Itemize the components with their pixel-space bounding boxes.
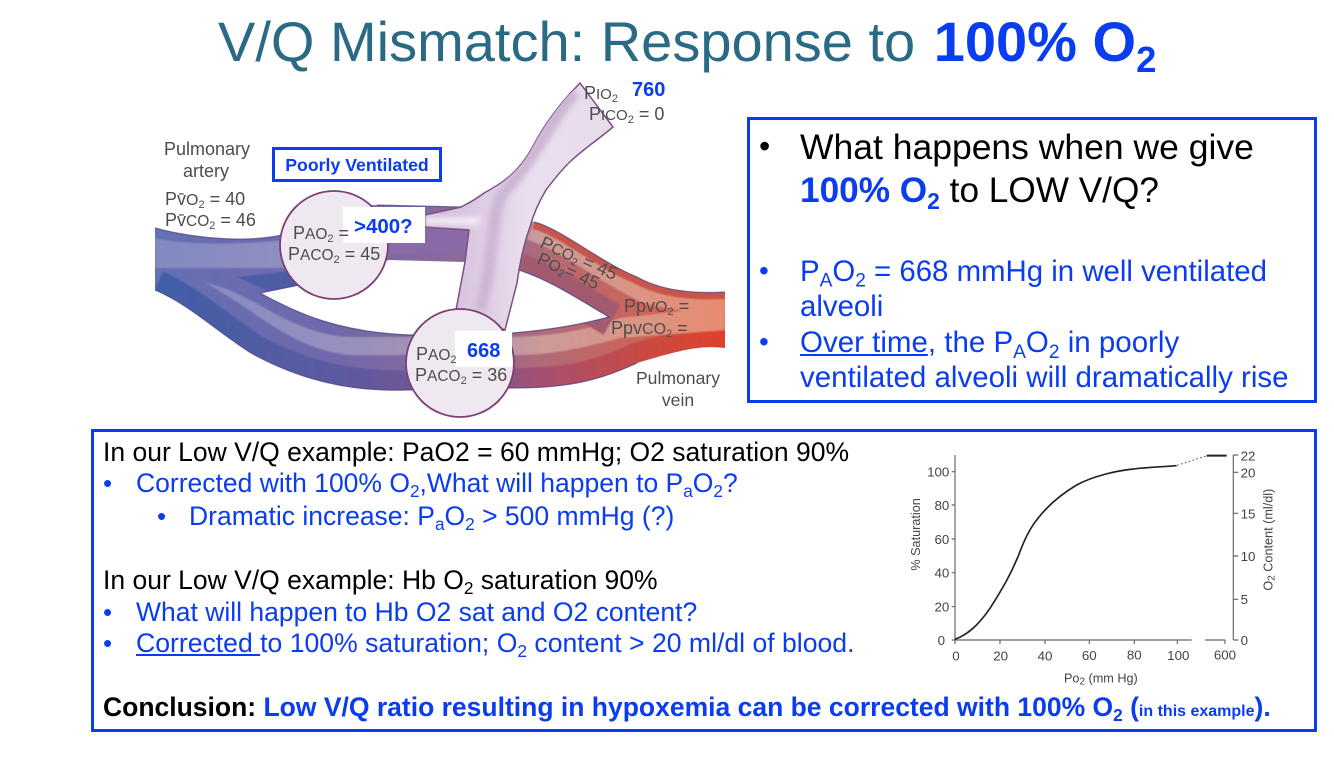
text: In our Low V/Q example: PaO2 = 60 mmHg; O2 saturation 90% <box>103 437 849 467</box>
diagram labels: 2 <box>556 267 566 281</box>
diagram labels: Pv̄CO <box>165 210 209 230</box>
diagram labels: = <box>334 223 349 243</box>
blue values: 668 <box>467 340 500 362</box>
diagram labels: = 0 <box>634 104 664 124</box>
text: • <box>103 597 112 627</box>
text: alveoli <box>800 290 883 323</box>
panel: worked example <box>91 429 1317 732</box>
blue values: >400? <box>354 215 413 238</box>
text: What will happen to Hb O2 sat and O2 content? <box>136 597 697 627</box>
diagram labels: Pulmonary <box>636 368 720 388</box>
diagram labels: PACO <box>288 244 334 264</box>
oxygen dissociation chart: 20 <box>1241 465 1255 480</box>
diagram labels: = 46 <box>215 210 256 230</box>
diagram labels: 2 <box>667 306 674 318</box>
oxygen dissociation chart: 20 <box>993 649 1008 664</box>
oxygen dissociation chart: % Saturation <box>909 498 923 571</box>
text: 100% O2 to LOW V/Q? <box>800 171 1159 214</box>
alveolus: poorly ventilated <box>280 191 388 299</box>
text: • <box>759 255 769 286</box>
diagram labels <box>164 83 720 410</box>
oxygen dissociation chart: Content (ml/dl) <box>1262 489 1276 575</box>
text: Corrected to 100% saturation; O2 content > 20 ml/dl of blood. <box>136 628 854 661</box>
diagram labels: Pulmonary <box>164 139 250 159</box>
airway <box>425 83 613 330</box>
alveolus: well ventilated <box>406 309 514 417</box>
blue values <box>354 79 665 362</box>
oxygen dissociation chart: 40 <box>1038 649 1052 664</box>
diagram labels: = 40 <box>205 189 245 209</box>
diagram labels: 2 <box>612 93 618 105</box>
diagram labels: = <box>672 318 688 338</box>
oxygen dissociation chart: O <box>1262 581 1276 591</box>
oxygen dissociation chart: 22 <box>1241 449 1255 464</box>
oxygen dissociation chart: (mm Hg) <box>1085 672 1138 686</box>
oxygen dissociation chart: 10 <box>1241 549 1255 564</box>
diagram labels: vein <box>662 390 694 410</box>
vessels <box>155 205 725 390</box>
oxygen dissociation chart: Po <box>1064 672 1079 686</box>
diagram labels: = 45 <box>340 244 380 264</box>
text: ventilated alveoli will dramatically rise <box>800 361 1289 394</box>
diagram labels: PIO <box>584 83 612 103</box>
oxygen dissociation chart <box>909 449 1278 688</box>
diagram labels: PpvO <box>624 296 667 316</box>
diagram labels: 2 <box>569 256 579 269</box>
oxygen dissociation chart: 600 <box>1214 647 1236 662</box>
oxygen dissociation chart: 60 <box>1082 648 1097 663</box>
diagram labels: PCO <box>537 232 577 265</box>
title: V/Q Mismatch: Response to 100% O2 <box>218 10 1156 80</box>
diagram labels: artery <box>183 161 229 181</box>
label: poorly ventilated <box>272 147 442 182</box>
diagram labels: PAO <box>293 223 327 243</box>
text: Corrected with 100% O2,What will happen to PaO2? <box>136 468 738 501</box>
text: • <box>103 468 112 498</box>
text: • <box>759 326 769 357</box>
label: poorly ventilated: Poorly Ventilated <box>285 155 429 175</box>
text: What happens when we give <box>800 127 1254 167</box>
diagram labels: 2 <box>334 254 340 266</box>
diagram labels: 2 <box>461 375 467 387</box>
diagram labels: 2 <box>628 114 634 126</box>
panel: low V/Q question <box>747 117 1317 403</box>
diagram labels: PO <box>534 248 563 276</box>
text: • <box>103 628 112 658</box>
text: • <box>157 501 166 531</box>
oxygen dissociation chart: 40 <box>934 566 949 581</box>
diagram: pulmonary gas exchange <box>154 82 1275 685</box>
diagram labels: = 36 <box>467 365 507 385</box>
text: Over time, the PAO2 in poorly <box>800 326 1179 363</box>
question text <box>759 127 1289 394</box>
example text <box>103 437 1271 725</box>
diagram labels: PICO <box>589 104 628 124</box>
oxygen dissociation chart: 2 <box>1079 677 1085 688</box>
value patch: 668 <box>455 331 512 367</box>
diagram labels: PAO <box>416 344 450 364</box>
diagram labels: Pv̄O <box>165 189 198 209</box>
diagram labels: = 45 <box>575 249 620 284</box>
text: Conclusion: Low V/Q ratio resulting in hypoxemia can be corrected with 100% O2 (in this example). <box>103 692 1271 725</box>
blue values: 760 <box>632 79 665 101</box>
oxygen dissociation chart: 2 <box>1267 575 1278 581</box>
oxygen dissociation chart: 0 <box>1241 633 1248 648</box>
oxygen dissociation chart: 0 <box>952 649 960 664</box>
diagram labels: = <box>674 296 689 316</box>
diagram labels: 2 <box>327 233 334 245</box>
oxygen dissociation chart: 100 <box>927 465 949 480</box>
oxygen dissociation chart: 60 <box>934 532 949 547</box>
oxygen dissociation chart: 15 <box>1241 506 1255 521</box>
diagram labels: PACO <box>415 365 461 385</box>
oxygen dissociation chart: 80 <box>934 498 949 513</box>
diagram labels: = 45 <box>562 261 603 293</box>
diagram labels: PpvCO <box>611 318 666 338</box>
oxygen dissociation chart: 5 <box>1241 592 1248 607</box>
diagram labels: 2 <box>209 220 215 232</box>
text: PAO2 = 668 mmHg in well ventilated <box>800 255 1267 292</box>
oxygen dissociation chart: 20 <box>934 600 949 615</box>
oxygen dissociation chart: 100 <box>1167 648 1189 663</box>
text: In our Low V/Q example: Hb O2 saturation 90% <box>103 565 658 598</box>
diagram labels: 2 <box>198 199 205 211</box>
diagram labels: 2 <box>666 328 672 340</box>
oxygen dissociation chart: 0 <box>938 633 945 648</box>
text: • <box>759 128 770 164</box>
diagram labels: 2 <box>450 354 457 366</box>
value patch: >400 <box>343 207 425 243</box>
text: Dramatic increase: PaO2 > 500 mmHg (?) <box>189 501 674 534</box>
oxygen dissociation chart: 80 <box>1127 647 1142 662</box>
